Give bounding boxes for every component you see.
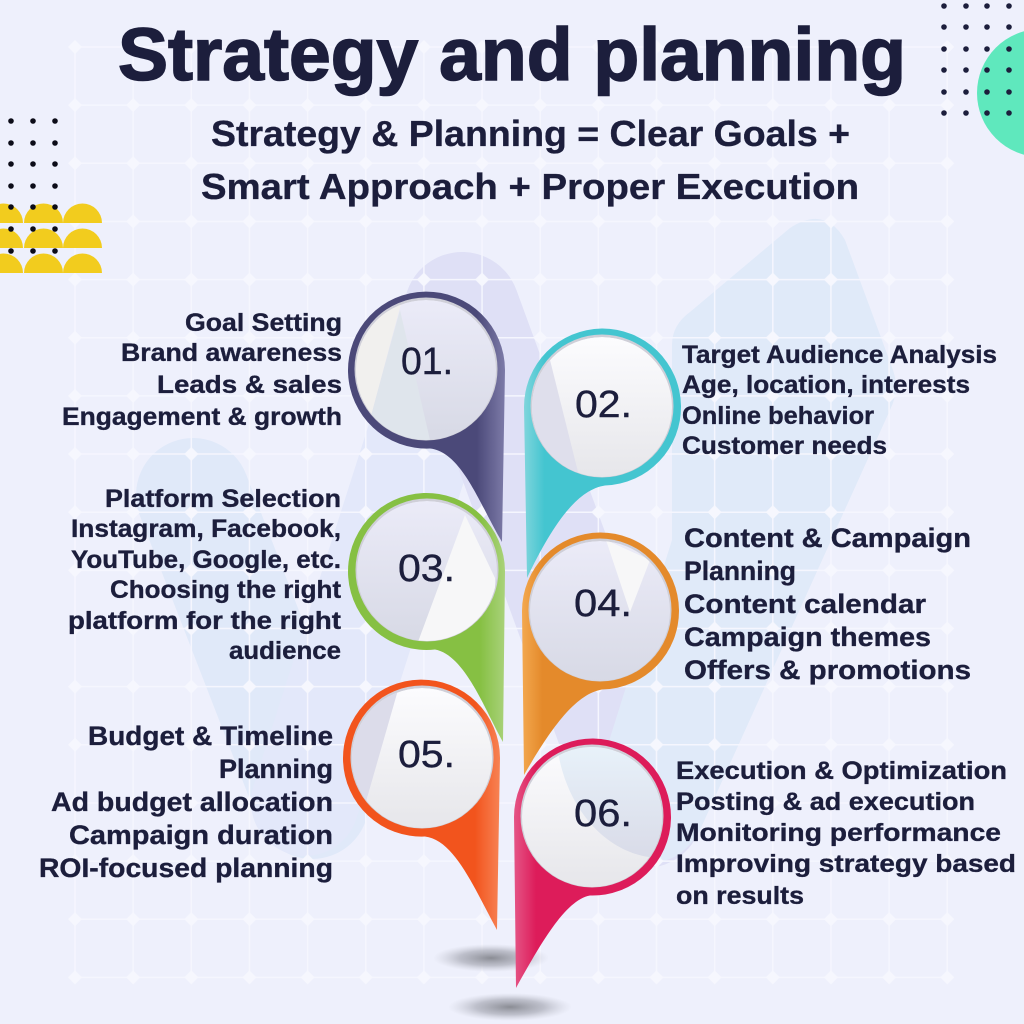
text block: step 04: Offers & promotions <box>684 655 971 685</box>
text block: step 05: Budget & Timeline <box>88 721 333 751</box>
text block: step 02: Target Audience Analysis <box>682 341 997 369</box>
text block: step 02: Online behavior <box>682 402 874 430</box>
text block: step 01: Brand awareness <box>121 339 342 367</box>
text block: step 01: Leads & sales <box>157 371 342 399</box>
pin 06: 06. <box>574 793 632 835</box>
decoration: yellow half circles <box>0 204 102 273</box>
text block: step 03 <box>68 485 342 665</box>
pin 02 <box>524 329 681 578</box>
text block: step 06: Monitoring performance <box>676 819 1001 847</box>
background watermark shapes <box>193 219 896 861</box>
text block: step 03: platform for the right <box>68 607 342 635</box>
text block: step 03: Instagram, Facebook, <box>71 515 341 543</box>
text block: step 02: Customer needs <box>682 432 887 460</box>
text block: step 01: Goal Setting <box>185 309 342 337</box>
text block: step 06: on results <box>676 882 804 910</box>
text block: step 06: Posting & ad execution <box>676 788 975 816</box>
pin 02: 02. <box>575 384 632 426</box>
pin 04 <box>522 533 679 775</box>
text block: step 04: Campaign themes <box>684 622 931 652</box>
text block: step 01 <box>62 309 342 431</box>
text block: step 01: Engagement & growth <box>62 403 342 431</box>
title: Strategy and planning <box>118 13 906 96</box>
text block: step 03: audience <box>229 637 341 665</box>
decoration: top left dots <box>8 118 58 254</box>
text block: step 04: Planning <box>684 556 796 586</box>
text block: step 05: Planning <box>219 754 333 784</box>
ground shadow: pin 05 <box>433 944 549 972</box>
text block: step 03: YouTube, Google, etc. <box>71 546 341 574</box>
text block: step 02 <box>682 341 997 460</box>
pin 06 <box>514 739 671 988</box>
text block: step 04: Content & Campaign <box>684 523 971 553</box>
decoration: top right dots <box>941 3 1012 116</box>
pin 03 <box>348 493 505 742</box>
pin 01: 01. <box>401 341 453 383</box>
pin 01 <box>348 292 505 542</box>
text block: step 04 <box>684 523 971 685</box>
subtitle <box>201 113 859 207</box>
text block: step 03: Choosing the right <box>110 576 342 604</box>
pin 03: 03. <box>398 548 455 590</box>
text block: step 06: Execution & Optimization <box>676 757 1007 785</box>
subtitle: Smart Approach + Proper Execution <box>201 166 859 207</box>
text block: step 06: Improving strategy based <box>676 850 1016 878</box>
text block: step 04: Content calendar <box>684 589 927 619</box>
text block: step 03: Platform Selection <box>105 485 341 513</box>
text block: step 05 <box>39 721 333 883</box>
pin 05 <box>343 680 500 930</box>
text block: step 05: ROI-focused planning <box>39 853 333 883</box>
decoration: green circle <box>977 29 1024 157</box>
text block: step 05: Campaign duration <box>69 820 333 850</box>
text block: step 05: Ad budget allocation <box>51 787 333 817</box>
pin 04: 04. <box>574 583 632 625</box>
pin 05: 05. <box>398 734 455 776</box>
ground shadow: pin 06 <box>448 993 572 1021</box>
text block: step 06 <box>676 757 1016 910</box>
text block: step 02: Age, location, interests <box>682 371 970 399</box>
subtitle: Strategy & Planning = Clear Goals + <box>211 113 850 154</box>
